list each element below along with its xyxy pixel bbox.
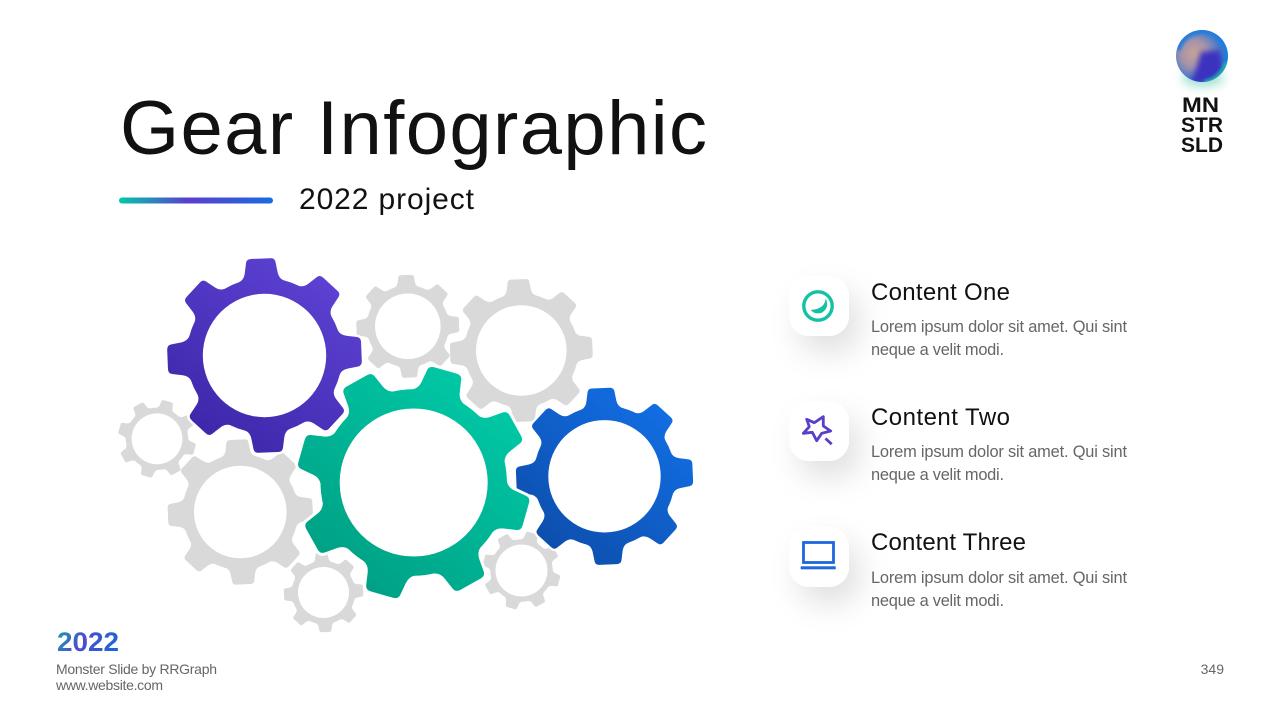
gear: blue xyxy=(513,384,696,568)
logo: wordmark: STR xyxy=(1181,113,1223,137)
logo: wordmark: MN xyxy=(1182,93,1219,117)
gear: grey top right xyxy=(447,276,595,425)
accent rule xyxy=(119,198,273,204)
heading one: Content One xyxy=(871,279,1010,306)
icon: laptop xyxy=(801,542,836,569)
page number: 349 xyxy=(1201,661,1224,677)
title: Gear Infographic xyxy=(120,86,707,171)
item: content three xyxy=(789,527,1127,610)
icon: magic wand star xyxy=(803,417,832,444)
icon card one xyxy=(789,276,849,336)
gear: green xyxy=(295,365,530,598)
footer credits xyxy=(55,661,217,693)
logo: sphere xyxy=(1176,30,1228,87)
text one xyxy=(871,318,1127,359)
gear cluster xyxy=(109,255,696,634)
gear: grey top centre xyxy=(355,273,461,379)
gear: grey far left small xyxy=(109,391,205,487)
text two xyxy=(871,443,1127,484)
icon card three xyxy=(789,527,849,587)
footer year: 2022 xyxy=(57,627,119,657)
item: content two xyxy=(789,402,1127,484)
gear: grey bottom right small xyxy=(473,522,570,619)
item: content one xyxy=(789,276,1127,359)
subtitle: 2022 project xyxy=(299,183,475,216)
gear: purple xyxy=(164,255,365,456)
heading three: Content Three xyxy=(871,529,1026,556)
gear: grey bottom small xyxy=(282,551,365,634)
text one: neque a velit modi. xyxy=(871,341,1004,359)
gear: grey lower left xyxy=(165,437,316,587)
text three: Lorem ipsum dolor sit amet. Qui sint xyxy=(871,569,1127,587)
text three: neque a velit modi. xyxy=(871,592,1004,610)
logo xyxy=(1176,30,1228,157)
logo: wordmark xyxy=(1181,93,1223,157)
heading two: Content Two xyxy=(871,404,1010,431)
footer credits: www.website.com xyxy=(55,677,163,693)
text three xyxy=(871,569,1127,610)
footer credits: Monster Slide by RRGraph xyxy=(56,661,217,677)
icon: moon in circle xyxy=(804,292,832,320)
icon card two xyxy=(789,402,849,461)
text one: Lorem ipsum dolor sit amet. Qui sint xyxy=(871,318,1127,336)
text two: Lorem ipsum dolor sit amet. Qui sint xyxy=(871,443,1127,461)
text two: neque a velit modi. xyxy=(871,466,1004,484)
logo: wordmark: SLD xyxy=(1181,133,1223,157)
